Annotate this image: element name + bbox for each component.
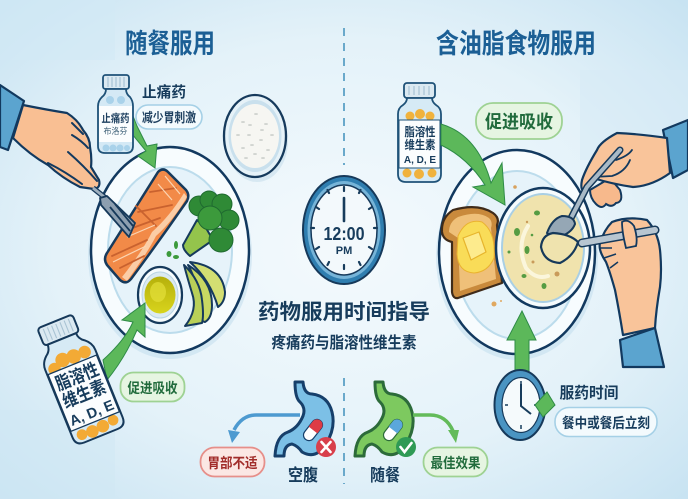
capsule: [301, 417, 325, 443]
label: medication time: 服药时间: [560, 384, 618, 402]
green arrow: right vitamins to soup: [441, 124, 505, 205]
green arrow: painkiller to plate: [132, 116, 157, 168]
pill: stomach discomfort: 胃部不适: [208, 455, 258, 471]
herbs: [166, 241, 179, 259]
rice bowl: [224, 95, 288, 182]
soup bowl: [496, 188, 590, 308]
left plate meal: [88, 147, 252, 359]
label: empty stomach: 空腹: [288, 465, 318, 485]
small clock: [494, 370, 555, 440]
vitamin bottle right: 维生素: [404, 137, 436, 152]
vitamin bottle right: 脂溶性: [404, 124, 436, 139]
upper spoon: [570, 150, 620, 220]
pill: best effect: 最佳效果: [430, 455, 480, 471]
bottom hand with spoon: [541, 218, 664, 367]
vitamin bottle left: 脂溶性: [52, 358, 102, 394]
pill: reduce stomach irritation: 减少胃刺激: [142, 110, 196, 125]
pill: promote absorption right: 促进吸收: [485, 112, 553, 132]
pill: stomach discomfort: [200, 448, 264, 476]
heading: with meals: 随餐服用: [125, 29, 215, 59]
check badge: [396, 437, 416, 457]
label: painkiller: 止痛药: [142, 83, 186, 101]
vitamin bottle left: A, D, E: [68, 397, 117, 430]
right plate meal: [436, 150, 598, 360]
center divider bottom: [343, 378, 345, 484]
left hand with fork: [0, 85, 135, 237]
painkiller bottle: 止痛药: [102, 111, 130, 125]
heading: with fatty food: 含油脂食物服用: [436, 29, 596, 59]
label: with meal: 随餐: [370, 466, 400, 485]
center divider top: [343, 28, 345, 165]
avocado slices: [184, 262, 225, 326]
vitamin bottle right: [398, 83, 441, 182]
broccoli: [183, 191, 239, 256]
central clock: PM: [336, 245, 352, 257]
painkiller bottle: 布洛芬: [104, 126, 128, 136]
central clock: 12:00: [324, 224, 364, 244]
main title: 药物服用时间指导: [258, 301, 430, 324]
blue stomach fasting: [275, 382, 336, 457]
vitamin bottle left: 维生素: [60, 377, 109, 412]
pill: reduce stomach irritation: [136, 105, 202, 129]
central clock: [303, 176, 385, 284]
painkiller bottle: [98, 75, 133, 153]
green arrow: clock to plate: [507, 311, 536, 372]
pill: promote absorption left: 促进吸收: [128, 380, 178, 396]
toast with butter: [442, 207, 502, 298]
x badge: [316, 437, 336, 457]
fork: [93, 188, 108, 200]
green arrow to best effect: [413, 415, 453, 431]
pill: during or right after meal: 餐中或餐后立刻: [562, 415, 650, 431]
olive oil dish: [138, 267, 182, 323]
vitamin bottle left: [30, 311, 126, 446]
pill: promote absorption right: [476, 103, 562, 139]
pill: best effect: [424, 448, 488, 476]
pill: during or right after meal: [555, 408, 657, 436]
blue arrow to discomfort: [234, 415, 300, 430]
salmon: [105, 170, 188, 282]
pill: promote absorption left: [120, 372, 184, 402]
vitamin bottle right: A, D, E: [404, 155, 436, 166]
capsule: [381, 417, 405, 443]
subtitle: 疼痛药与脂溶性维生素: [272, 333, 416, 352]
top hand with spoon: [547, 120, 688, 237]
green arrow: vitamins to oil: [103, 303, 145, 380]
green stomach with meal: [355, 382, 416, 457]
